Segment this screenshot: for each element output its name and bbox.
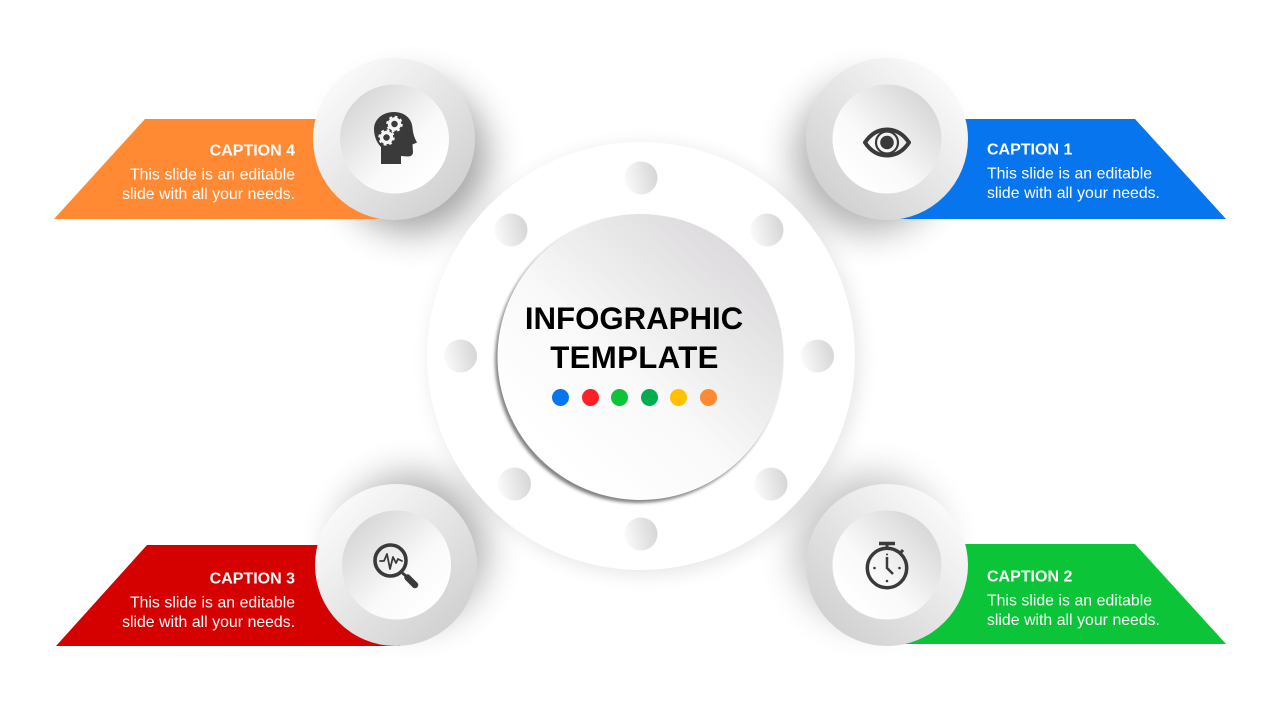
caption 2 text: CAPTION 2 xyxy=(987,568,1072,586)
caption 3 text xyxy=(122,570,295,631)
icon: stopwatch xyxy=(867,544,907,588)
badge: caption 4 head icon xyxy=(313,58,475,220)
ring dot lower left xyxy=(498,468,531,500)
caption 1 text: slide with all your needs. xyxy=(987,185,1160,202)
ring dot top xyxy=(624,162,658,194)
caption 2 text xyxy=(987,568,1160,629)
ring dot right xyxy=(801,340,834,372)
ribbon: caption 2 green xyxy=(895,544,1226,644)
ribbon: caption 4 orange xyxy=(54,119,400,219)
badge: caption 2 stopwatch icon xyxy=(806,484,968,646)
ring dot left xyxy=(444,340,477,372)
icon: head with gears xyxy=(374,112,417,164)
caption 3 text: This slide is an editable xyxy=(130,594,295,612)
caption 1 text: This slide is an editable xyxy=(987,166,1152,182)
icon: magnifier with pulse xyxy=(375,545,415,585)
caption 1 text: CAPTION 1 xyxy=(987,142,1072,158)
badge: caption 1 eye icon xyxy=(806,58,968,220)
caption 2 text: slide with all your needs. xyxy=(987,612,1160,629)
caption 4 text: This slide is an editable xyxy=(130,166,295,184)
ribbon: caption 3 red xyxy=(56,545,400,646)
caption 4 text: CAPTION 4 xyxy=(210,142,295,160)
ring dot bottom xyxy=(624,518,658,550)
ribbon: caption 1 blue xyxy=(880,119,1226,219)
badge: caption 3 magnifier icon xyxy=(315,484,477,646)
central disc with title xyxy=(495,214,784,503)
icon: eye xyxy=(865,130,909,156)
central ring panel xyxy=(427,142,859,574)
caption 2 text: This slide is an editable xyxy=(987,592,1152,610)
ring dot upper left xyxy=(494,214,528,246)
title: INFOGRAPHIC xyxy=(525,301,743,336)
caption 4 text xyxy=(122,142,295,203)
caption 1 text xyxy=(987,142,1160,202)
ring dot lower right xyxy=(754,468,788,500)
caption 3 text: slide with all your needs. xyxy=(122,614,295,631)
caption 4 text: slide with all your needs. xyxy=(122,186,295,203)
title: TEMPLATE xyxy=(550,340,719,375)
colour dots xyxy=(552,389,717,406)
caption 3 text: CAPTION 3 xyxy=(210,570,295,588)
ring dot upper right xyxy=(750,214,784,246)
